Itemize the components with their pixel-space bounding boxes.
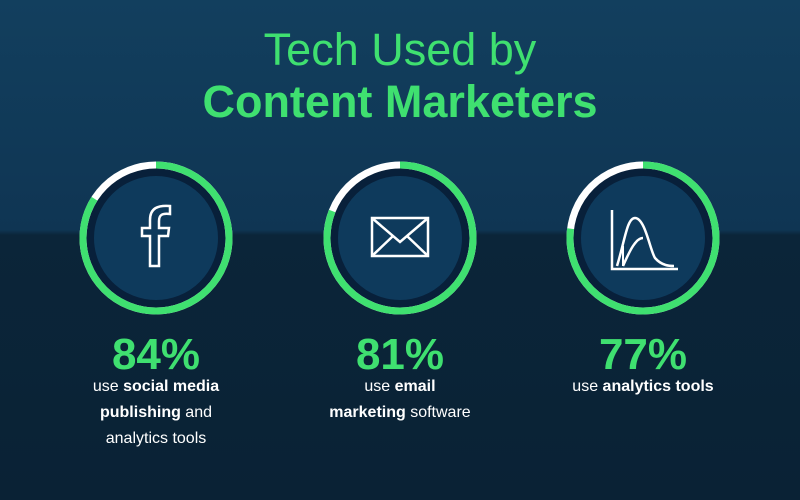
text 1 xyxy=(93,378,220,447)
ring: 84% facebook xyxy=(83,165,229,311)
text 2: marketing software xyxy=(329,404,471,421)
text 2 xyxy=(329,378,471,421)
ring: 81% email xyxy=(327,165,473,311)
text 1: publishing and xyxy=(100,404,212,421)
ring: 77% analytics xyxy=(570,165,716,311)
stat 1: 84% xyxy=(112,330,200,379)
stat 2: 81% xyxy=(356,330,444,379)
text 2: use email xyxy=(364,378,436,395)
title xyxy=(202,24,598,127)
title: Tech Used by xyxy=(264,24,536,75)
text 1: analytics tools xyxy=(106,430,206,447)
text 1: use social media xyxy=(93,378,219,395)
stat 3: 77% xyxy=(599,330,687,379)
text 3: use analytics tools xyxy=(572,378,714,395)
title: Content Marketers xyxy=(202,76,598,127)
